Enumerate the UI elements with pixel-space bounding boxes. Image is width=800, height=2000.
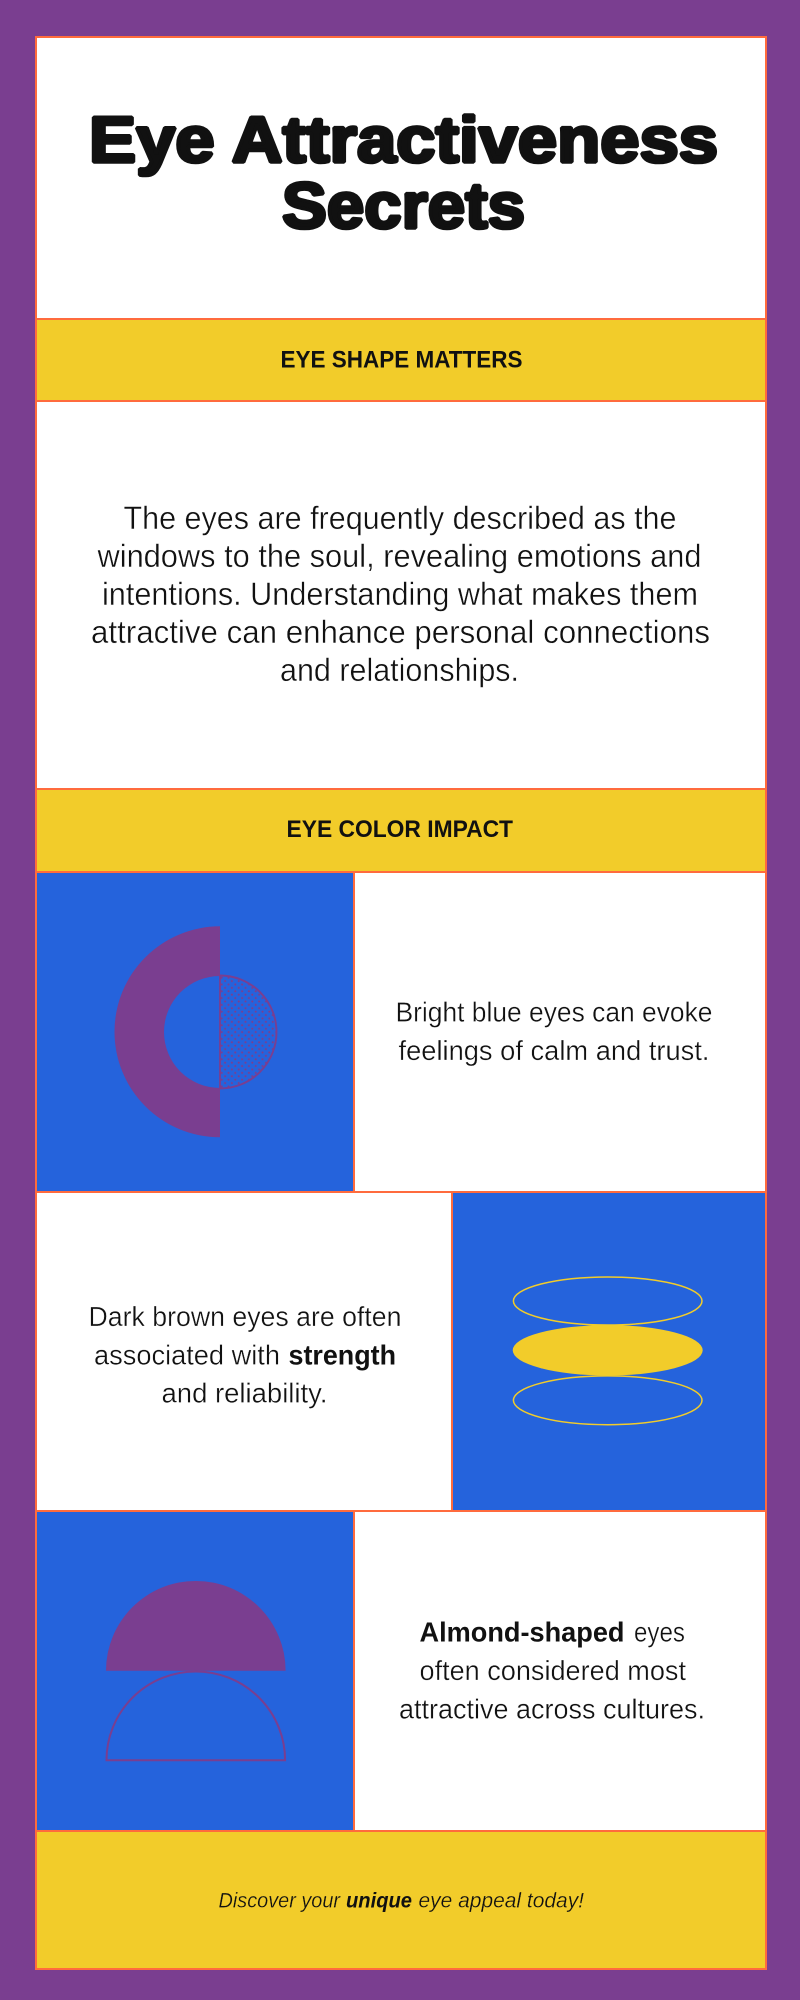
panel: almond eyes text	[354, 1511, 766, 1831]
text block: introduction	[91, 500, 710, 688]
text block: brown eyes	[88, 1301, 402, 1408]
text block: almond eyes: often considered most	[420, 1655, 686, 1686]
text block: call to action: unique	[346, 1890, 412, 1912]
text block: almond eyes: attractive across cultures.	[399, 1694, 705, 1724]
panel: introduction	[36, 401, 766, 789]
text block: brown eyes: associated with	[94, 1340, 280, 1370]
text block: call to action: eye appeal today!	[418, 1890, 584, 1912]
icon: half ring and dotted half circle	[114, 926, 277, 1137]
heading: eye shape matters: EYE SHAPE MATTERS	[280, 346, 522, 374]
text block: introduction: windows to the soul, revealing emotions and	[97, 538, 702, 574]
panel: brown eyes image	[452, 1192, 766, 1511]
icon: two half circles	[106, 1581, 286, 1760]
title: Secrets	[282, 169, 525, 242]
panel: blue eyes text	[354, 872, 766, 1192]
title: Eye Attractiveness	[89, 103, 718, 176]
panel: eye shape heading	[36, 319, 766, 401]
panel: blue eyes image	[36, 872, 354, 1192]
panel: almond eyes image	[36, 1511, 354, 1831]
text block: brown eyes: Dark brown eyes are often	[88, 1301, 402, 1332]
text block: call to action	[218, 1890, 584, 1912]
heading: eye color impact: EYE COLOR IMPACT	[286, 816, 513, 843]
icon: three stacked ellipses	[513, 1277, 703, 1425]
text block: brown eyes: strength	[288, 1340, 396, 1370]
title	[89, 103, 718, 242]
text block: blue eyes	[396, 996, 712, 1066]
panel: brown eyes text	[36, 1192, 452, 1511]
panel: footer	[36, 1831, 766, 1969]
text block: brown eyes: and reliability.	[162, 1378, 328, 1408]
text block: introduction: and relationships.	[280, 652, 519, 688]
panel: title	[36, 37, 766, 319]
panel: eye color heading	[36, 789, 766, 872]
text block: introduction: intentions. Understanding what makes them	[102, 576, 698, 612]
text block: introduction: The eyes are frequently described as the	[124, 500, 676, 536]
text block: almond eyes	[399, 1616, 705, 1724]
text block: introduction: attractive can enhance personal connections	[91, 614, 710, 650]
text block: blue eyes: feelings of calm and trust.	[398, 1035, 710, 1066]
text block: almond eyes: eyes	[634, 1616, 685, 1648]
text block: call to action: Discover your	[218, 1890, 341, 1912]
text block: almond eyes: Almond-shaped	[420, 1616, 624, 1648]
text block: blue eyes: Bright blue eyes can evoke	[396, 996, 712, 1028]
